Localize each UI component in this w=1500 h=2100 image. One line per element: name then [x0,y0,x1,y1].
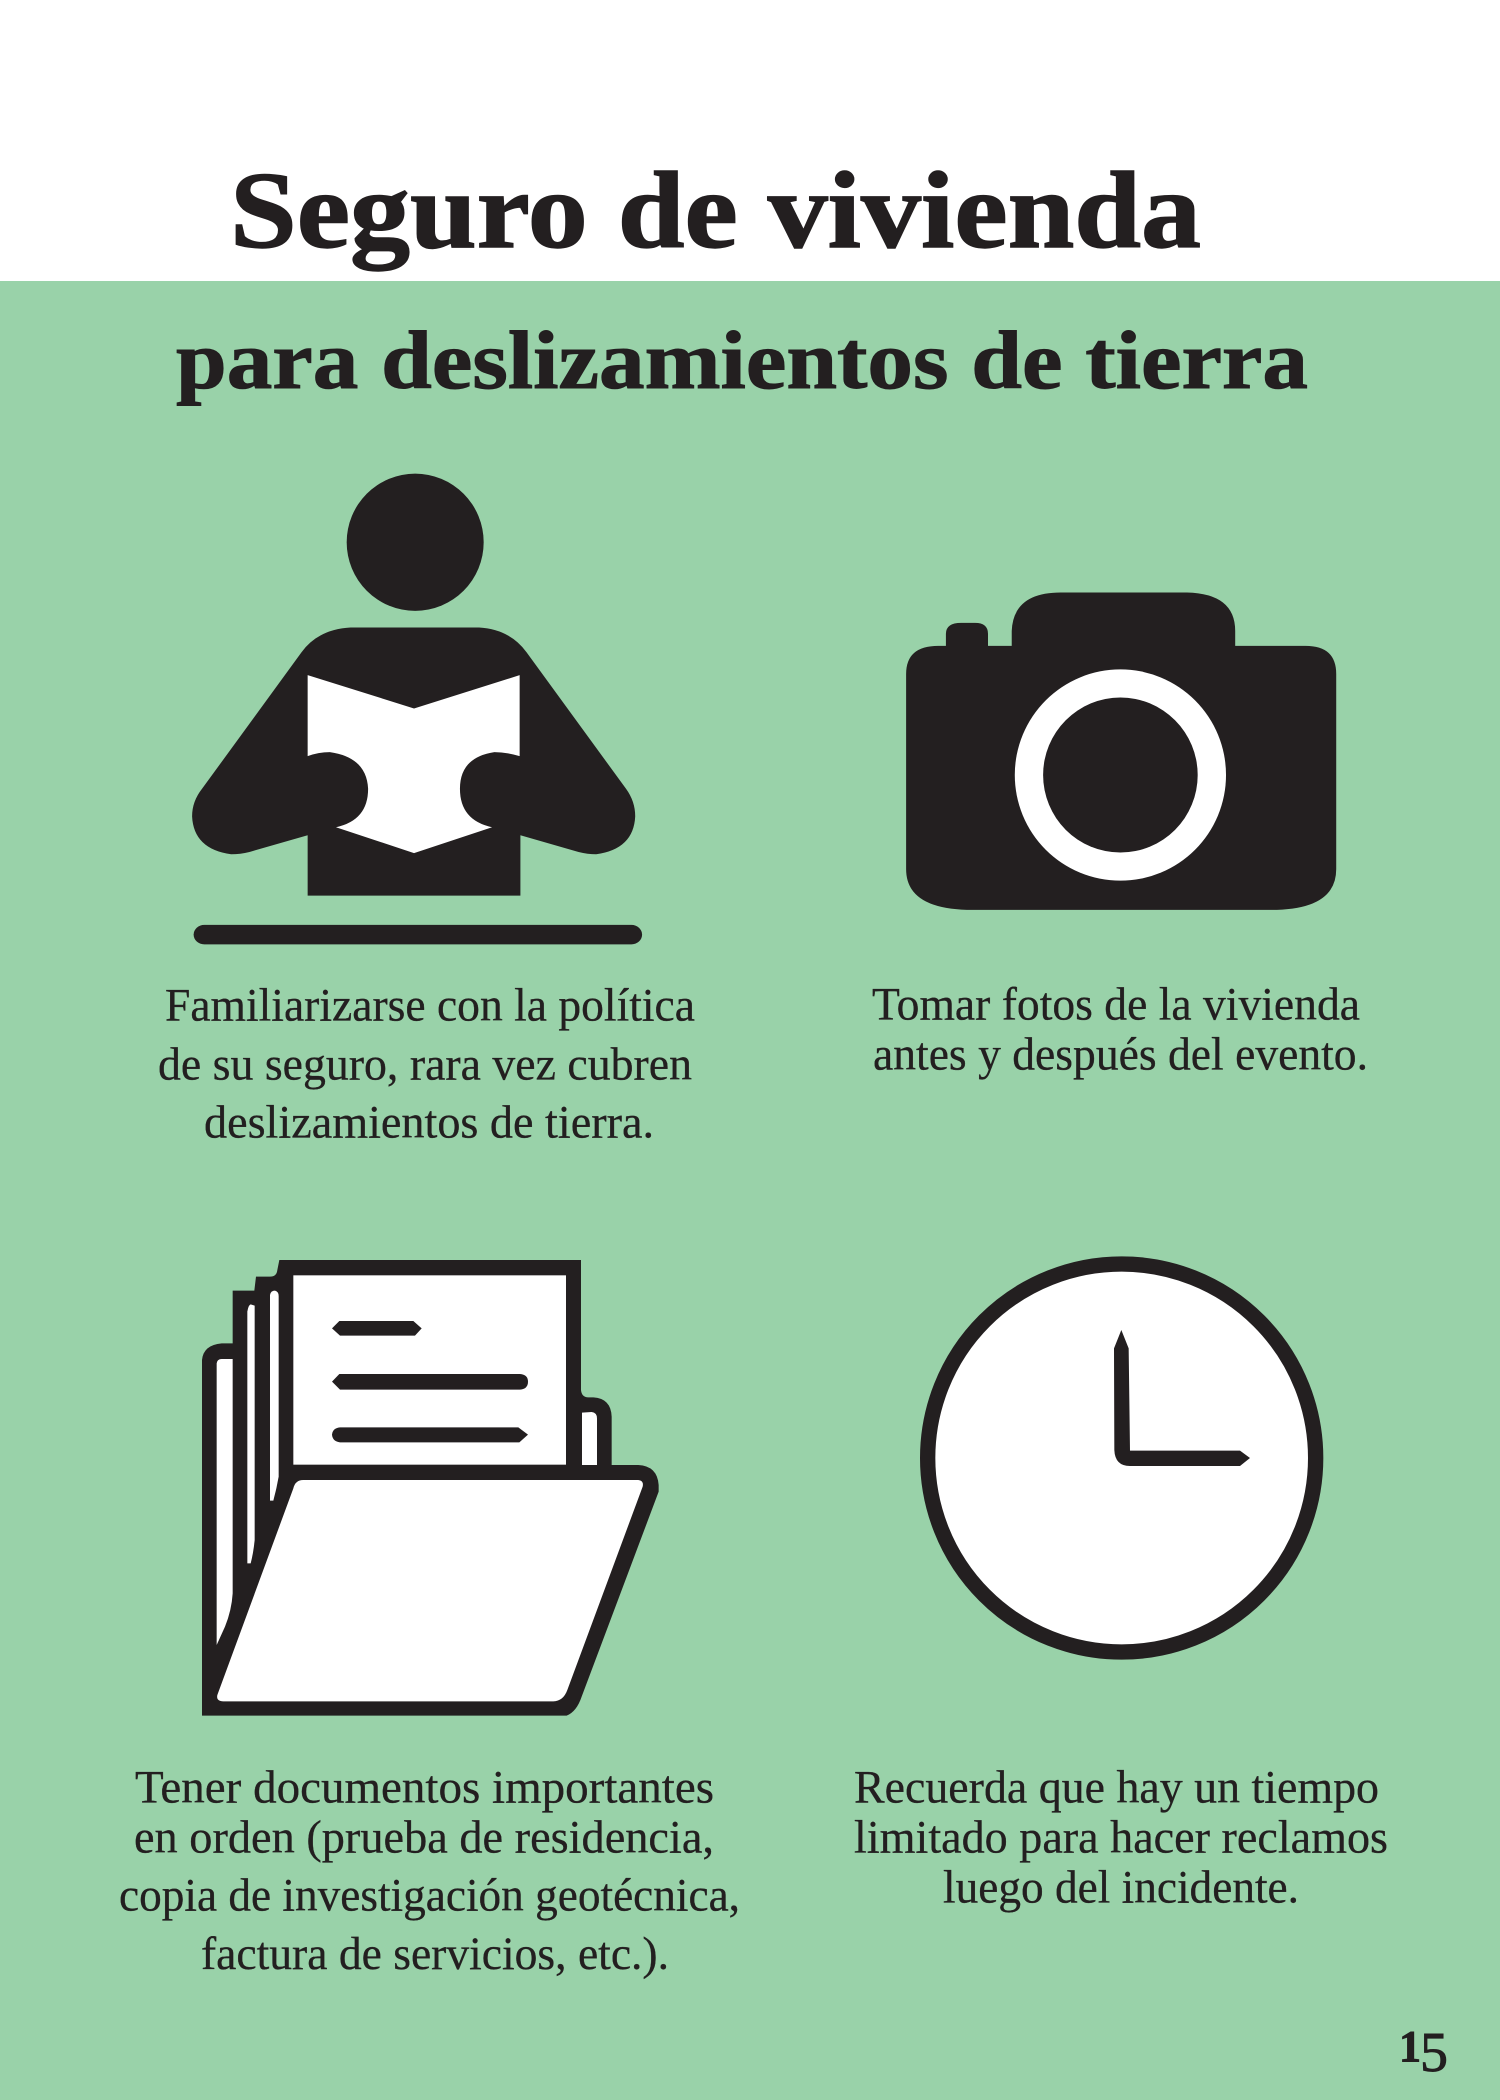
panel: documents in order [119,1260,740,1980]
text: limited time for claims [854,1762,1388,1914]
text: read your policy: de su seguro, rara vez cubren [158,1038,692,1090]
text: documents in order: copia de investigación geotécnica, [119,1870,740,1922]
text: limited time for claims: luego del incidente. [943,1862,1299,1914]
title: Seguro de vivienda [230,150,1201,271]
panel: read your policy [158,474,695,1148]
subtitle: para deslizamientos de tierra [176,314,1308,406]
text: documents in order: factura de servicios, etc.). [201,1928,669,1980]
icon: clock [928,1264,1316,1652]
text: take photos [872,978,1368,1080]
text: read your policy: Familiarizarse con la política [165,980,695,1032]
page number: 1 [1399,2022,1421,2071]
text: limited time for claims: limitado para hacer reclamos [854,1812,1388,1864]
icon: camera [906,592,1336,910]
text: read your policy [158,980,695,1148]
panel: limited time for claims [854,1264,1388,1914]
panel: take photos [872,592,1368,1080]
icon: person reading a book [192,474,642,944]
text: documents in order: en orden (prueba de residencia, [134,1812,714,1864]
icon: open folder with documents [202,1260,659,1716]
text: take photos: Tomar fotos de la vivienda [872,978,1360,1030]
text: read your policy: deslizamientos de tierra. [204,1096,654,1148]
text: documents in order [119,1762,740,1980]
page number: 5 [1420,2022,1448,2084]
text: documents in order: Tener documentos importantes [135,1762,714,1814]
text: take photos: antes y después del evento. [873,1028,1368,1080]
text: limited time for claims: Recuerda que hay un tiempo [854,1762,1379,1814]
